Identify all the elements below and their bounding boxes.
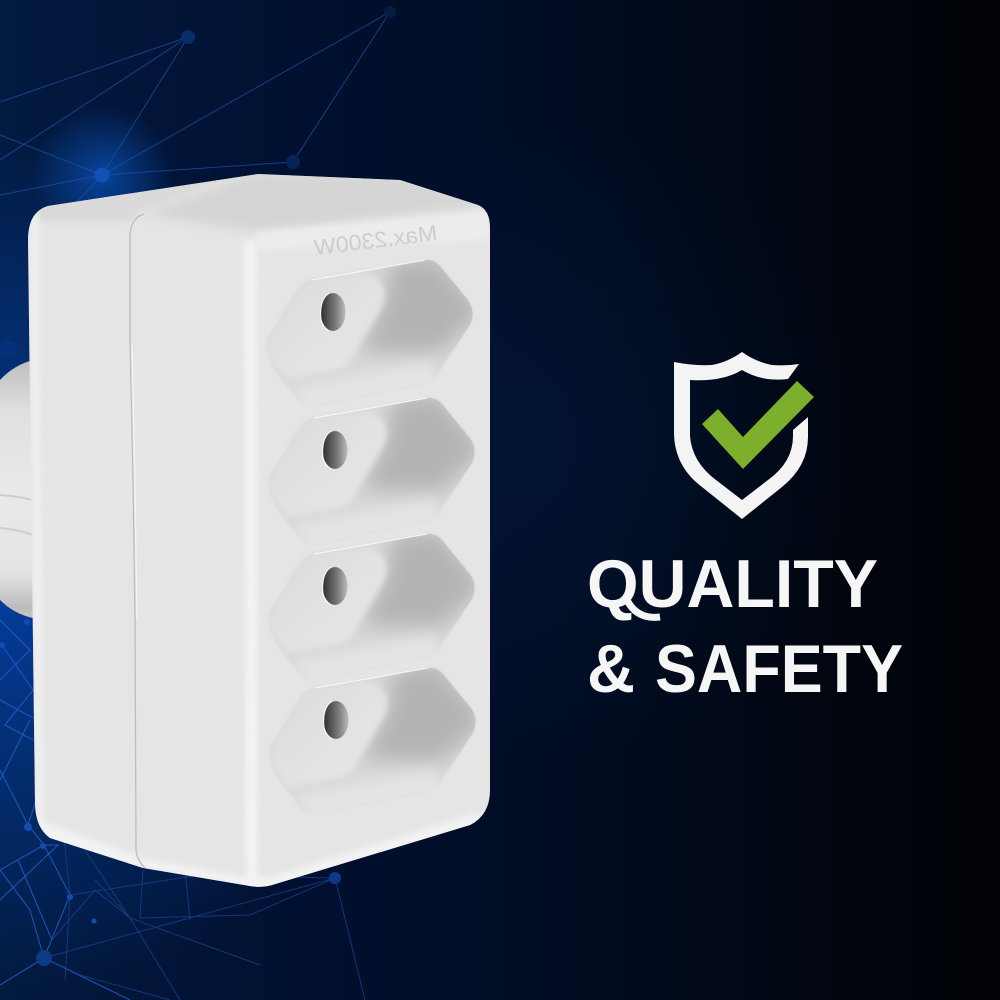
socket row 1 <box>267 256 482 416</box>
socket row 2 <box>269 394 484 554</box>
heading: quality and safety: QUALITY <box>587 546 878 622</box>
shield outline <box>674 352 808 519</box>
top face and shading <box>20 168 495 892</box>
seam between housing halves <box>130 214 145 868</box>
network lines and nodes <box>0 6 396 1000</box>
housing silhouette <box>28 174 490 887</box>
embossed rating text: Max.2300W <box>312 220 439 260</box>
heading: quality and safety <box>587 546 903 707</box>
heading: quality and safety: & <box>587 631 635 707</box>
socket row 3 <box>269 530 484 690</box>
icon: shield with check mark <box>674 352 814 519</box>
green check mark <box>702 381 814 469</box>
product: quadruple socket adapter <box>0 168 495 892</box>
socket row 4 <box>270 664 485 824</box>
plug cylinder at back <box>0 360 33 618</box>
heading: quality and safety: SAFETY <box>655 631 903 707</box>
